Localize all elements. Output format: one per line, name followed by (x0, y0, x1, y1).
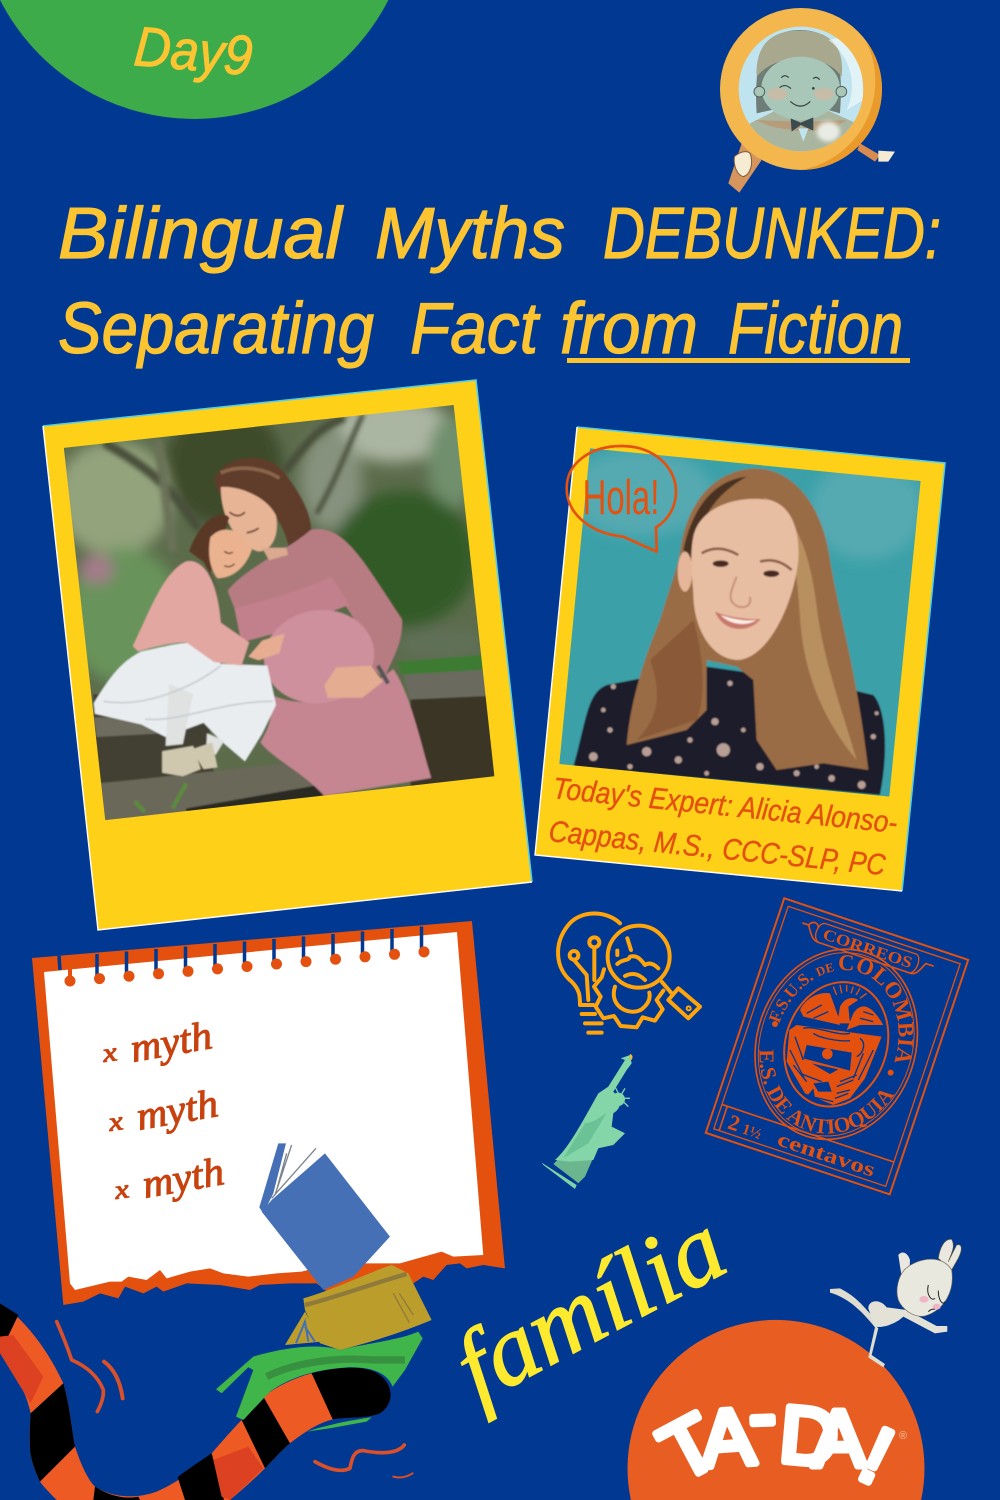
Ta-Da logo: TA-DA! (646, 1369, 906, 1500)
stamp text: F.S.U.S. DE COLOMBIA (768, 955, 914, 1062)
blue book (259, 1143, 390, 1290)
title line 2: from (560, 289, 698, 369)
notepad (32, 921, 505, 1305)
yellow book (285, 1265, 432, 1350)
icon: statue of liberty (542, 1054, 633, 1189)
shoulders: floral blouse (573, 667, 885, 795)
myth list: myth (133, 1080, 221, 1139)
stamp eagle and shield (772, 985, 894, 1105)
day badge (0, 0, 388, 119)
myth list: myth (127, 1012, 215, 1071)
mother dress (260, 669, 431, 796)
photo: pregnant mother hugging daughter (52, 394, 507, 830)
photo: expert portrait (550, 440, 930, 807)
myth list: x (100, 1037, 119, 1068)
stamp text (725, 926, 914, 1182)
title line 2: Fiction (728, 289, 903, 369)
illustration: striped sock, shoe and books (0, 1143, 432, 1500)
title line 2: Separating (58, 289, 374, 369)
polaroid: mother and daughter (43, 380, 532, 930)
expert caption: Today's Expert: Alicia Alonso- (551, 772, 899, 840)
motion squiggles (57, 1322, 413, 1477)
expert caption (547, 772, 899, 882)
stamp text: centavos (774, 1129, 878, 1182)
title line 2 (58, 289, 903, 369)
mother face (221, 487, 277, 551)
stamp text: 1½ (740, 1121, 763, 1143)
daughter cardigan (133, 561, 249, 666)
speech bubble: Hola: Hola! (583, 470, 659, 525)
title (58, 194, 941, 369)
polaroid: today's expert (535, 427, 945, 891)
green shoe (216, 1332, 423, 1432)
mother hair (214, 458, 312, 546)
face (691, 499, 799, 660)
daughter tutu (94, 643, 276, 761)
expert caption: Cappas, M.S., CCC-SLP, PC (547, 815, 887, 882)
title line 2: Fact (410, 289, 541, 369)
facial features (702, 549, 792, 570)
registered mark: ® (899, 1430, 907, 1442)
myth list: x (106, 1106, 125, 1137)
hair (627, 468, 868, 770)
stamp text: 2 (725, 1109, 743, 1136)
daughter hair and face (189, 514, 229, 594)
word: familia: família (436, 1190, 743, 1423)
speech bubble: Hola (567, 446, 676, 552)
striped sock (0, 1303, 391, 1500)
title line 1 (58, 194, 941, 274)
stamp text: CORREOS (820, 926, 914, 972)
icon: lightbulb, gear and magnifier (558, 914, 700, 1033)
day label: Day9 (132, 14, 255, 87)
icon: detective in magnifying glass (720, 8, 895, 193)
myth list: x (112, 1174, 131, 1205)
title line 1: Bilingual (58, 194, 344, 274)
orange Ta-Da circle (628, 1320, 924, 1500)
stamp: Colombia postage (704, 897, 970, 1196)
myth list (100, 1012, 227, 1207)
myth list: myth (139, 1148, 227, 1207)
stamp text: E.S. DE ANTIOQUIA (759, 1050, 894, 1134)
mother hand (324, 666, 383, 698)
notepad spiral rings (59, 926, 424, 981)
character: white rabbit (830, 1239, 961, 1367)
title line 1: Myths (375, 194, 565, 274)
stamp frame (714, 1104, 894, 1186)
